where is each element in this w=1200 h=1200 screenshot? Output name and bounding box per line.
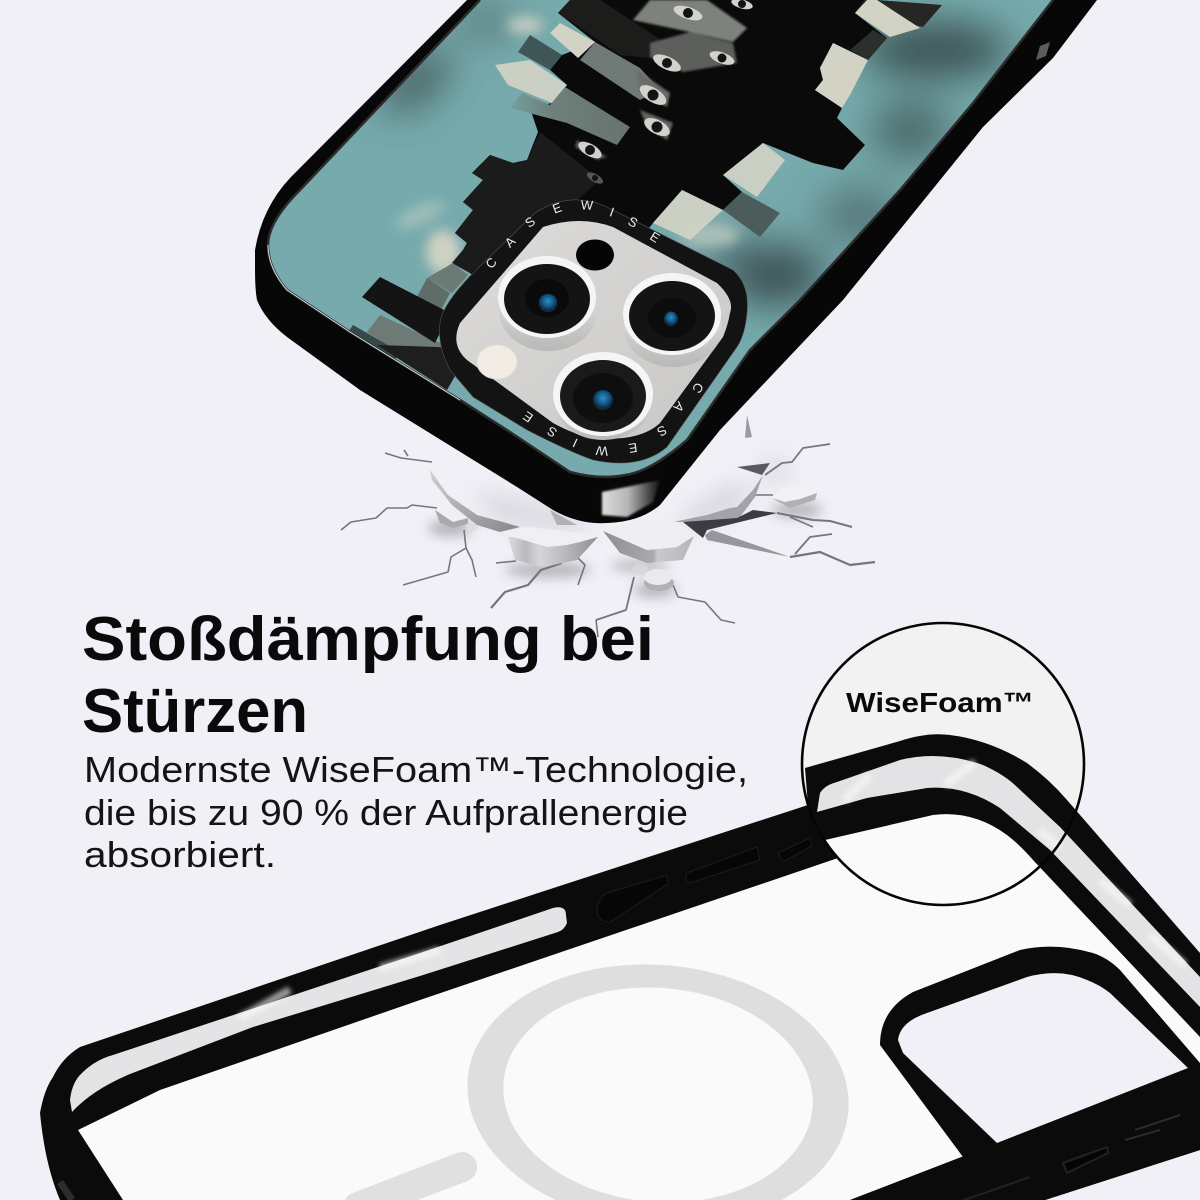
fragment: centre right (603, 519, 694, 563)
black silhouette (452, 0, 887, 300)
illustration: cracked ground (341, 415, 875, 637)
bumper lettering: W (595, 443, 609, 459)
grey strips (510, 30, 887, 237)
rim highlight (268, 245, 460, 400)
crack: upper wedge (745, 415, 752, 438)
redraw of the lower frame edge (850, 1065, 1200, 1200)
bumper lettering: C (482, 255, 500, 272)
face fragments (575, 0, 747, 160)
bumper lettering (482, 197, 707, 459)
bumper lettering: I (608, 204, 616, 220)
fragment: wedge (705, 530, 790, 557)
lens: bottom (553, 352, 653, 440)
crack: dark notch (737, 463, 770, 475)
bumper lettering: E (520, 408, 536, 426)
camera surround (880, 947, 1200, 1157)
foam streaks (240, 762, 1185, 1018)
illustration: upper phone with printed case (250, 0, 1097, 523)
fragment: small left rock (435, 506, 479, 533)
MagSafe ring (456, 949, 860, 1200)
pupils (585, 0, 746, 181)
crack shadows (428, 503, 823, 597)
case body (255, 0, 1097, 523)
bumper lettering: S (626, 213, 641, 231)
bumper lettering: E (550, 199, 564, 217)
body text: die bis zu 90 % der Aufprallenergie (84, 792, 688, 833)
foam channel: left (70, 907, 567, 1112)
body text: Modernste WiseFoam™-Technologie, (84, 749, 748, 790)
callout circle: WiseFoam detail (802, 623, 1084, 905)
bumper lettering: S (522, 213, 538, 231)
body text (84, 749, 748, 875)
heading: Stoßdämpfung bei (82, 605, 654, 674)
camera plate (456, 221, 731, 439)
bumper lettering: S (544, 423, 560, 441)
bottom buttons and ports (60, 1115, 1180, 1200)
side buttons (597, 838, 812, 922)
crack: dark gap (683, 510, 777, 538)
fragment: shard under phone (550, 510, 577, 525)
silhouette: lower-left blocks (452, 132, 600, 273)
case side button gloss (1036, 42, 1050, 60)
crack lines (341, 444, 875, 637)
foam channel: right (817, 756, 1200, 1007)
pale cloud wisps (393, 16, 740, 274)
case frame (40, 734, 1200, 1200)
bumper lettering: E (647, 228, 663, 246)
screen rim (268, 0, 1053, 477)
flash (477, 345, 517, 379)
eyes (576, 0, 754, 186)
microphone hole (576, 240, 614, 270)
silhouette: upper strip (558, 0, 660, 58)
bumper lettering: I (570, 435, 580, 451)
silhouette: lower right tail shade (855, 0, 942, 27)
callout label: WiseFoam™ (846, 687, 1034, 718)
fragment: centre left (507, 527, 598, 567)
case bottom highlight (602, 480, 660, 517)
illustration: clear case back view (40, 734, 1200, 1200)
fragment: bottom rocks (632, 564, 674, 591)
camera bumper ring (439, 200, 747, 463)
clouds (372, 7, 1010, 305)
heading: Stürzen (82, 677, 308, 746)
clear inner panel (78, 814, 1200, 1200)
bumper lettering: W (580, 197, 594, 213)
MagSafe alignment bar (358, 1167, 462, 1200)
case artwork: sky and silhouette (250, 0, 1070, 490)
pale blocks (495, 0, 920, 240)
lens: top left (498, 256, 597, 351)
camera cut-out (898, 973, 1188, 1143)
lens: right (623, 273, 722, 367)
bumper lettering: A (502, 233, 519, 250)
fragment: left edge (430, 470, 520, 532)
bumper lettering: S (654, 422, 669, 440)
fragment: right slab edge (673, 475, 763, 522)
soft shade around the impact (470, 450, 790, 532)
bumper lettering: A (670, 399, 687, 416)
callout circle background (802, 623, 1084, 905)
fragment: small right rock (772, 485, 817, 508)
bumper lettering: C (689, 380, 707, 396)
lower left art strips (348, 263, 470, 390)
heading (82, 605, 654, 746)
bumper lettering: E (627, 440, 638, 456)
body text: absorbiert. (84, 834, 276, 875)
